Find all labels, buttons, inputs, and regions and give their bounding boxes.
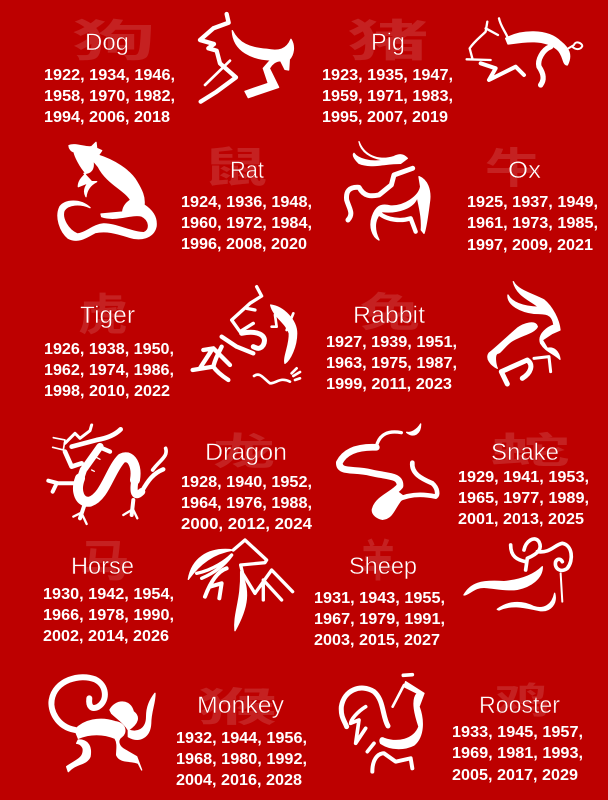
- panel: Rabbit: [326, 280, 560, 393]
- years: Monkey: 1932, 1944, 1956,: [176, 730, 307, 747]
- years: Dog: [44, 67, 175, 126]
- icon: dog: [200, 14, 293, 102]
- panel: Horse: 马: [80, 525, 130, 589]
- years: Pig: [322, 67, 453, 126]
- panel: Monkey: [51, 675, 307, 789]
- panel: Rat: [58, 134, 312, 253]
- years: Rabbit: 1999, 2011, 2023: [326, 376, 452, 393]
- icon: horse: [188, 540, 293, 631]
- years: Snake: 1929, 1941, 1953,: [458, 469, 589, 486]
- title: Ox: Ox: [508, 157, 541, 184]
- years: Snake: 1965, 1977, 1989,: [458, 490, 589, 507]
- years: Dog: 1994, 2006, 2018: [44, 109, 170, 126]
- years: Dragon: 2000, 2012, 2024: [181, 516, 312, 533]
- panel: Snake: 蛇: [490, 422, 570, 474]
- years: Rooster: 2005, 2017, 2029: [452, 767, 578, 784]
- title: Horse: Horse: [71, 553, 134, 580]
- years: Pig: 1995, 2007, 2019: [322, 109, 448, 126]
- years: Ox: [467, 194, 598, 254]
- panel: Tiger: 虎: [78, 279, 128, 343]
- years: Ox: 1961, 1973, 1985,: [467, 215, 598, 232]
- panel: Dragon: 龙: [213, 421, 275, 476]
- years: Rat: 1996, 2008, 2020: [181, 236, 307, 253]
- title: Rooster: Rooster: [479, 692, 560, 719]
- years: Pig: 1923, 1935, 1947,: [322, 67, 453, 84]
- icon: sheep: [464, 539, 571, 611]
- years: Snake: [458, 469, 589, 528]
- panel: Dog: [44, 5, 293, 126]
- years: Rat: [181, 194, 312, 253]
- title: Sheep: Sheep: [349, 553, 417, 580]
- title: Rabbit: Rabbit: [353, 302, 425, 329]
- years: Horse: 2002, 2014, 2026: [43, 628, 169, 645]
- panel: Pig: 猪: [347, 5, 429, 69]
- years: Dog: 1958, 1970, 1982,: [44, 88, 175, 105]
- years: Tiger: [44, 341, 174, 400]
- years: Ox: 1925, 1937, 1949,: [467, 194, 598, 211]
- years: Dragon: [181, 474, 312, 533]
- years: Horse: [43, 586, 174, 645]
- years: Rooster: 1933, 1945, 1957,: [452, 724, 583, 741]
- years: Horse: 1966, 1978, 1990,: [43, 607, 174, 624]
- years: Sheep: [314, 590, 445, 649]
- panel: Snake: [339, 422, 589, 528]
- years: Rabbit: [326, 334, 457, 393]
- years: Dog: 1922, 1934, 1946,: [44, 67, 175, 84]
- icon: rabbit: [488, 282, 560, 384]
- title: Dog: Dog: [85, 29, 129, 56]
- years: Monkey: 2004, 2016, 2028: [176, 772, 302, 789]
- years: Dragon: 1928, 1940, 1952,: [181, 474, 312, 491]
- icon: snake: [339, 424, 437, 519]
- icon: ox: [346, 142, 430, 240]
- title: Dragon: Dragon: [205, 439, 287, 466]
- years: Horse: 1930, 1942, 1954,: [43, 586, 174, 603]
- years: Rabbit: 1963, 1975, 1987,: [326, 355, 457, 372]
- years: Rooster: 1969, 1981, 1993,: [452, 745, 583, 762]
- years: Sheep: 1967, 1979, 1991,: [314, 611, 445, 628]
- years: Dragon: 1964, 1976, 1988,: [181, 495, 312, 512]
- title: Rat: Rat: [230, 157, 264, 184]
- panel: Ox: 牛: [485, 135, 541, 196]
- title: Pig: Pig: [371, 29, 405, 56]
- years: Snake: 2001, 2013, 2025: [458, 511, 584, 528]
- panel: Monkey: 猴: [197, 675, 277, 733]
- years: Tiger: 1962, 1974, 1986,: [44, 362, 174, 379]
- years: Rabbit: 1927, 1939, 1951,: [326, 334, 457, 351]
- panel: Horse: [43, 525, 293, 645]
- years: Rat: 1924, 1936, 1948,: [181, 194, 312, 211]
- years: Monkey: [176, 730, 307, 789]
- years: Ox: 1997, 2009, 2021: [467, 237, 593, 254]
- years: Tiger: 1926, 1938, 1950,: [44, 341, 174, 358]
- title: Snake: Snake: [491, 439, 559, 466]
- panel: Dragon: [48, 421, 312, 533]
- panel: Sheep: [314, 525, 571, 649]
- years: Sheep: 1931, 1943, 1955,: [314, 590, 445, 607]
- years: Pig: 1959, 1971, 1983,: [322, 88, 453, 105]
- years: Sheep: 2003, 2015, 2027: [314, 632, 440, 649]
- panel: Pig: [322, 5, 582, 126]
- panel: Sheep: 羊: [360, 525, 396, 589]
- years: Monkey: 1968, 1980, 1992,: [176, 751, 307, 768]
- panel: Ox: [346, 135, 598, 254]
- years: Rat: 1960, 1972, 1984,: [181, 215, 312, 232]
- icon: rooster: [341, 675, 424, 772]
- title: Tiger: Tiger: [80, 302, 135, 329]
- panel: Rat: 鼠: [203, 134, 267, 195]
- icon: pig: [467, 18, 582, 85]
- panel: Tiger: [44, 279, 300, 400]
- panel: Rooster: [341, 672, 583, 784]
- years: Rooster: [452, 724, 583, 784]
- panel: Dog: 狗: [72, 5, 156, 69]
- icon: dragon: [48, 425, 166, 524]
- icon: monkey: [51, 677, 155, 772]
- title: Monkey: Monkey: [197, 692, 284, 719]
- panel: Rooster: 鸡: [495, 672, 550, 724]
- panel: Rabbit: 兔: [360, 280, 420, 338]
- years: Tiger: 1998, 2010, 2022: [44, 383, 170, 400]
- icon: rat: [58, 142, 156, 240]
- icon: tiger: [193, 287, 300, 383]
